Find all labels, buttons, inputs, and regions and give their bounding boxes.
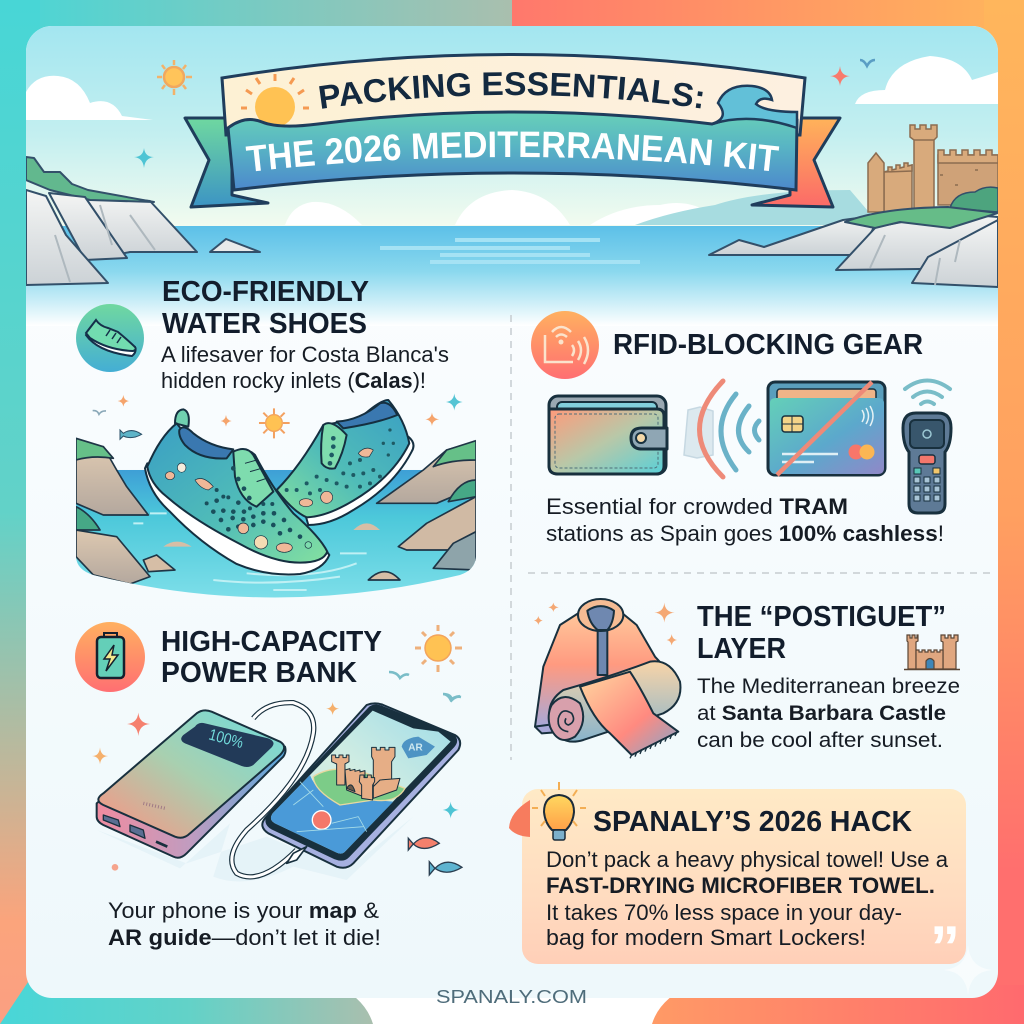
power bank xyxy=(97,710,286,858)
title line 1: PACKING ESSENTIALS: xyxy=(319,72,703,109)
heading: the postiguet layer: LAYER xyxy=(697,633,786,665)
ribbon tails xyxy=(185,118,840,207)
phone: AR xyxy=(408,743,423,754)
text: hack description xyxy=(546,847,949,950)
heading: the postiguet layer: THE “POSTIGUET” xyxy=(697,601,946,633)
footer: spanaly.com: SPANALY.COM xyxy=(436,987,587,1007)
power bank: 100% xyxy=(207,727,245,752)
heading: the postiguet layer xyxy=(697,601,946,665)
icon: red quote mark xyxy=(509,800,530,837)
text: postiguet description: The Mediterranean breeze xyxy=(697,674,960,698)
soft shadow xyxy=(97,817,413,881)
icon: wallet xyxy=(549,396,667,474)
illustration: shoes in rocky inlet xyxy=(76,393,476,603)
banner blue band xyxy=(228,112,797,190)
icon: shoe badge xyxy=(76,304,144,372)
text: shoes description: hidden rocky inlets (Calas)! xyxy=(161,368,426,393)
cable xyxy=(232,703,314,877)
castle on phone xyxy=(332,747,400,800)
coastal header scene xyxy=(26,26,998,326)
icon: credit card with strike xyxy=(768,382,885,475)
text: power bank description xyxy=(108,898,381,950)
heading: high-capacity power bank xyxy=(162,630,382,682)
icon: battery badge xyxy=(75,622,145,692)
cream upper banner xyxy=(222,54,805,135)
text: rfid description: stations as Spain goes 100% cashless! xyxy=(546,521,944,546)
illustration: power bank and phone xyxy=(92,694,462,881)
icon: small castle xyxy=(904,635,960,670)
text: power bank description: AR guide —don’t let it die! xyxy=(108,925,381,950)
callout: spanaly's 2026 hack xyxy=(509,782,992,995)
text: rfid description xyxy=(546,494,944,546)
text: hack description: Don’t pack a heavy physical towel! Use a xyxy=(546,847,949,872)
phone xyxy=(262,703,460,868)
heading: high-capacity power bank: POWER BANK xyxy=(161,657,357,689)
heading: hack: SPANALY’S 2026 HACK xyxy=(593,806,912,838)
title banner xyxy=(183,53,842,208)
icon: banner wave xyxy=(712,86,797,128)
icon: rfid badge xyxy=(531,311,599,379)
icon: banner sun xyxy=(241,74,309,127)
heading: eco-friendly water shoes: WATER SHOES xyxy=(162,308,367,340)
heading: eco-friendly water shoes: ECO-FRIENDLY xyxy=(162,276,369,308)
right cliffs xyxy=(709,207,998,287)
icon: light bulb xyxy=(532,782,586,840)
back shoe xyxy=(277,400,414,525)
left cliffs xyxy=(26,157,260,285)
text: postiguet description: can be cool after sunset. xyxy=(697,728,943,752)
text: postiguet description xyxy=(697,674,960,752)
icon: stars and bird xyxy=(134,60,875,168)
dividers xyxy=(511,315,996,760)
icon: rfid signal block xyxy=(684,381,759,477)
text: hack description: FAST-DRYING MICROFIBER TOWEL. xyxy=(546,873,935,898)
panel: eco-friendly water shoes xyxy=(76,276,476,603)
text: postiguet description: at Santa Barbara Castle xyxy=(697,701,946,725)
panel: the postiguet layer xyxy=(534,599,960,758)
panel: rfid-blocking gear xyxy=(531,311,951,546)
panel: high-capacity power bank xyxy=(75,622,462,950)
text: power bank description: Your phone is your map & xyxy=(108,898,379,923)
decorations: fish, sun, stars xyxy=(93,393,463,439)
castle xyxy=(868,125,998,215)
heading: rfid-blocking gear: RFID-BLOCKING GEAR xyxy=(613,329,923,361)
text: hack description: It takes 70% less space in your day- xyxy=(546,900,902,925)
decorations xyxy=(92,694,462,875)
icon: sun xyxy=(157,60,192,95)
text: hack description: bag for modern Smart Lockers! xyxy=(546,925,866,950)
icon: white quote and sparkle xyxy=(930,914,992,995)
text: shoes description xyxy=(161,342,449,393)
illustration: jacket and scarf xyxy=(534,599,680,758)
icon: sun and birds xyxy=(389,625,462,700)
icon: white quote and sparkle: ” xyxy=(930,914,960,981)
callout background xyxy=(522,789,966,964)
text: shoes description: A lifesaver for Costa Blanca's xyxy=(161,342,449,367)
icon: card reader xyxy=(903,380,951,513)
text: rfid description: Essential for crowded TRAM xyxy=(546,494,848,519)
title line 2: THE 2026 MEDITERRANEAN KIT xyxy=(246,132,780,172)
front shoe xyxy=(145,409,329,574)
heading: eco-friendly water shoes xyxy=(162,280,368,334)
heading: high-capacity power bank: HIGH-CAPACITY xyxy=(161,626,382,658)
